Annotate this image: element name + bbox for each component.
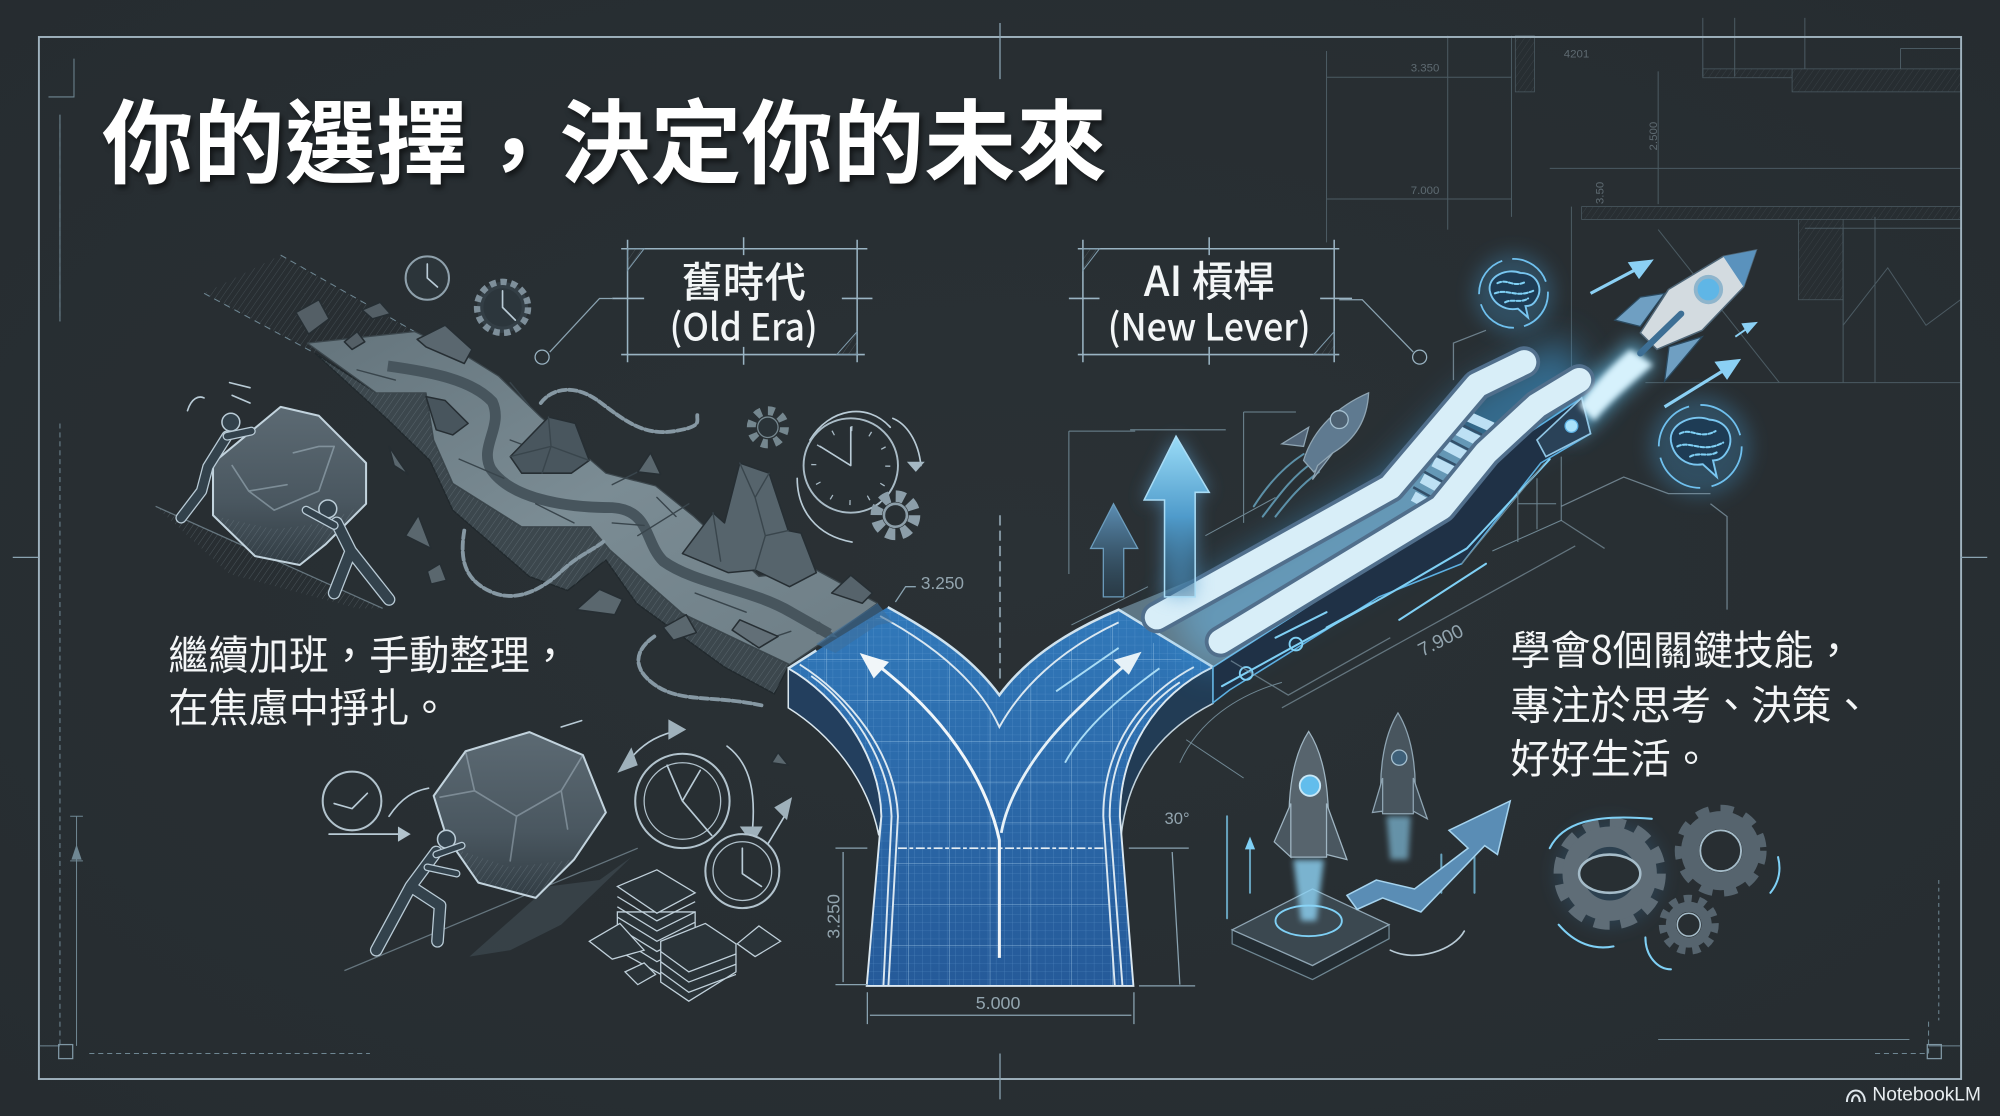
text: old era: 在焦慮中掙扎。 <box>168 675 449 734</box>
gears <box>1550 810 1779 969</box>
road: surface <box>788 607 1213 986</box>
escalator band B <box>1221 380 1579 642</box>
rocky path: cliff wall <box>315 353 790 694</box>
blue Y road <box>788 573 1213 1024</box>
blue Y road: 3.250 <box>823 894 843 939</box>
road: right arrow <box>1001 663 1128 833</box>
escalator steps <box>1413 416 1492 510</box>
escalator head panel <box>1537 398 1591 457</box>
old era: rocky path <box>204 255 878 765</box>
text: new lever: 專注於思考、決策、 <box>1510 672 1872 731</box>
blueprint background drawing: top right: 2.500 <box>1648 122 1660 151</box>
label box: AI lever: AI 槓桿 <box>1144 248 1275 308</box>
old era: chains <box>463 390 761 705</box>
small rocket <box>1254 393 1369 517</box>
callout connector and dimension 7.900 <box>1180 520 1605 778</box>
label box: old era: (Old Era) <box>670 297 818 352</box>
old era: boulder and worker top <box>156 383 389 608</box>
label box: AI lever <box>1069 237 1352 365</box>
blueprint background drawing: top right: 4201 <box>1564 48 1589 60</box>
up arrows <box>1069 412 1296 625</box>
road: side wall right <box>1120 667 1213 835</box>
growth arrow <box>1347 801 1510 912</box>
text: old era: 繼續加班，手動整理， <box>168 623 570 682</box>
label box: old era: 舊時代 <box>681 249 806 309</box>
blueprint background drawing: top right: 3.350 <box>1411 62 1439 74</box>
watermark: NotebookLM: NotebookLM <box>1872 1085 1981 1106</box>
title: 決定你的未來 <box>559 71 1107 203</box>
title: ， <box>468 82 559 214</box>
boulder <box>434 732 606 898</box>
escalator band A <box>1157 362 1524 617</box>
leader line: AI lever <box>1339 300 1427 364</box>
road: dashed midline <box>898 847 1103 849</box>
blue Y road: 5.000 <box>976 993 1020 1013</box>
escalator deck glow <box>1119 434 1505 667</box>
text: new lever <box>1510 617 1872 785</box>
boulder <box>213 407 366 565</box>
blueprint background drawing: top right: 3.50 <box>1594 182 1606 204</box>
leader line: old era <box>535 298 612 364</box>
callout connector and dimension 7.900: 7.900 <box>1415 621 1467 661</box>
rocket one <box>1289 731 1328 857</box>
road: dimensions <box>835 848 1134 1024</box>
bottom rockets and platform <box>1227 713 1510 980</box>
worker figure <box>376 830 462 950</box>
new lever: escalator base <box>1119 362 1591 703</box>
new lever: glow <box>1186 351 1645 638</box>
rocky path: rocks <box>417 325 472 363</box>
platform <box>1232 925 1389 980</box>
old era: paper stacks <box>589 870 781 1001</box>
worker figure <box>181 413 389 599</box>
title: 你的選擇 <box>102 71 467 203</box>
road: white left arrow <box>880 667 999 958</box>
blue Y road: 3.250 <box>921 573 964 593</box>
blueprint background drawing: top right <box>1327 18 1960 383</box>
rocket big <box>1579 250 1756 421</box>
text: old era <box>168 623 570 734</box>
blueprint background drawing: top right: 7.000 <box>1411 185 1439 197</box>
rocky path overlap on road <box>816 603 893 653</box>
old era: boulder and worker bottom <box>344 721 638 971</box>
rocky path: dark channel <box>388 366 829 634</box>
road: side wall left <box>788 668 881 835</box>
blue Y road: 30° <box>1165 809 1190 828</box>
road: edge lines <box>788 616 1213 986</box>
old era: small clock and gear clock <box>406 256 528 333</box>
speed arrows <box>1591 260 1756 407</box>
old era: clock and gears right <box>751 411 925 542</box>
text: new lever: 好好生活。 <box>1510 726 1711 785</box>
brain icons <box>1453 253 1751 610</box>
old era: lower clocks <box>323 719 792 908</box>
rocky path: top surface <box>307 332 878 664</box>
label box: old era <box>612 237 872 365</box>
rocket two <box>1386 816 1411 860</box>
text: new lever: 學會8個關鍵技能， <box>1510 617 1854 676</box>
label box: AI lever: (New Lever) <box>1108 297 1311 352</box>
